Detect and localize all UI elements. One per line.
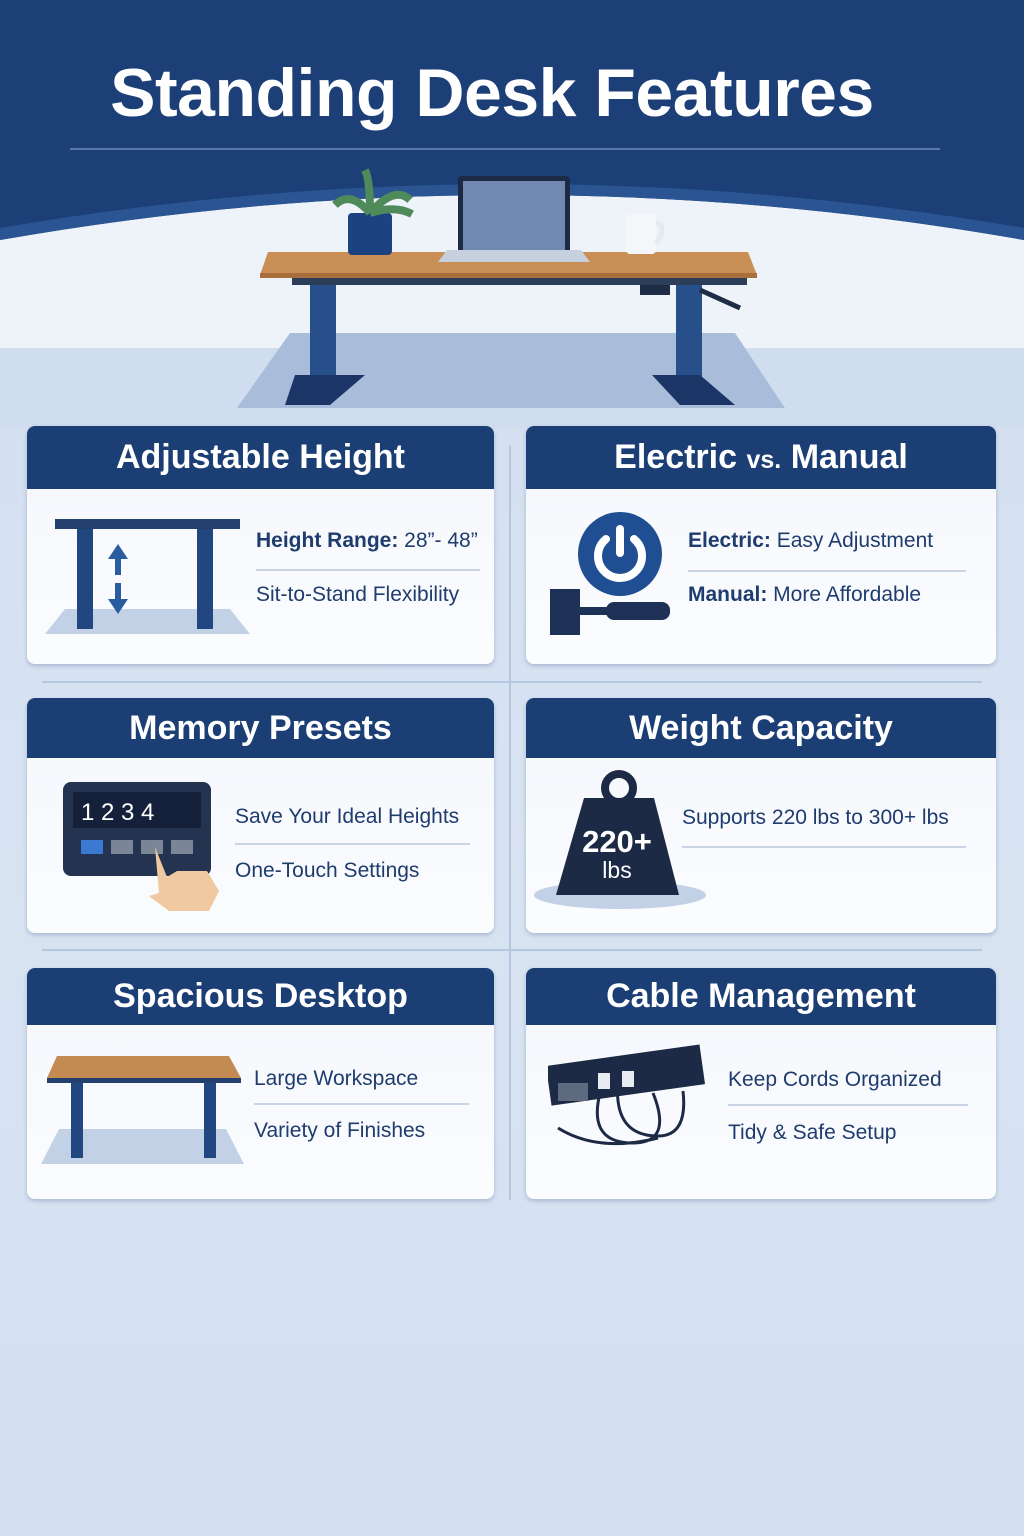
heading: Electric vs. Manual <box>614 438 908 476</box>
heading: Cable Management <box>606 977 916 1015</box>
panel: Electric vs. Manual: Manual: More Affordable <box>688 583 921 606</box>
heading <box>27 426 494 489</box>
icon: keypad: 1 2 3 4 <box>81 799 154 826</box>
panel: Adjustable Height <box>27 426 494 664</box>
text block: Electric: Easy Adjustment <box>688 529 933 552</box>
title: Standing Desk Features <box>110 55 874 131</box>
icon: cable tray <box>548 1044 705 1146</box>
panel: Weight Capacity <box>526 698 996 933</box>
header background <box>0 0 1024 348</box>
icon: weight: 220+ <box>582 824 652 859</box>
icon: adjustable desk <box>45 519 250 634</box>
text block: Save Your Ideal Heights <box>235 805 459 828</box>
heading: Weight Capacity <box>629 709 893 747</box>
panel: Electric vs. Manual <box>526 426 996 664</box>
heading <box>526 698 996 758</box>
icon: weight: lbs <box>602 857 632 883</box>
heading <box>526 426 996 489</box>
text block: Large Workspace <box>254 1067 418 1090</box>
heading <box>526 968 996 1025</box>
icon: desk <box>41 1056 244 1164</box>
heading: Adjustable Height <box>116 438 405 476</box>
icon: keypad <box>63 782 219 911</box>
floor <box>0 348 1024 428</box>
text block: Keep Cords Organized <box>728 1068 942 1091</box>
heading <box>27 698 494 758</box>
panel: Cable Management: Tidy & Safe Setup <box>728 1121 896 1144</box>
icon: power button and crank <box>550 512 670 635</box>
icon: weight <box>534 770 706 909</box>
text block: Supports 220 lbs to 300+ lbs <box>682 806 949 829</box>
hero desk illustration <box>237 168 785 408</box>
panel: Memory Presets: One-Touch Settings <box>235 859 419 882</box>
panel: Spacious Desktop <box>27 968 494 1199</box>
heading: Spacious Desktop <box>113 977 408 1015</box>
panel: Cable Management <box>526 968 996 1199</box>
heading: Memory Presets <box>129 709 392 747</box>
heading <box>27 968 494 1025</box>
panel: Adjustable Height: Sit-to-Stand Flexibility <box>256 583 459 606</box>
panel: Spacious Desktop: Variety of Finishes <box>254 1119 425 1142</box>
text block: Height Range: 28”- 48” <box>256 529 478 552</box>
panel: Memory Presets <box>27 698 494 933</box>
